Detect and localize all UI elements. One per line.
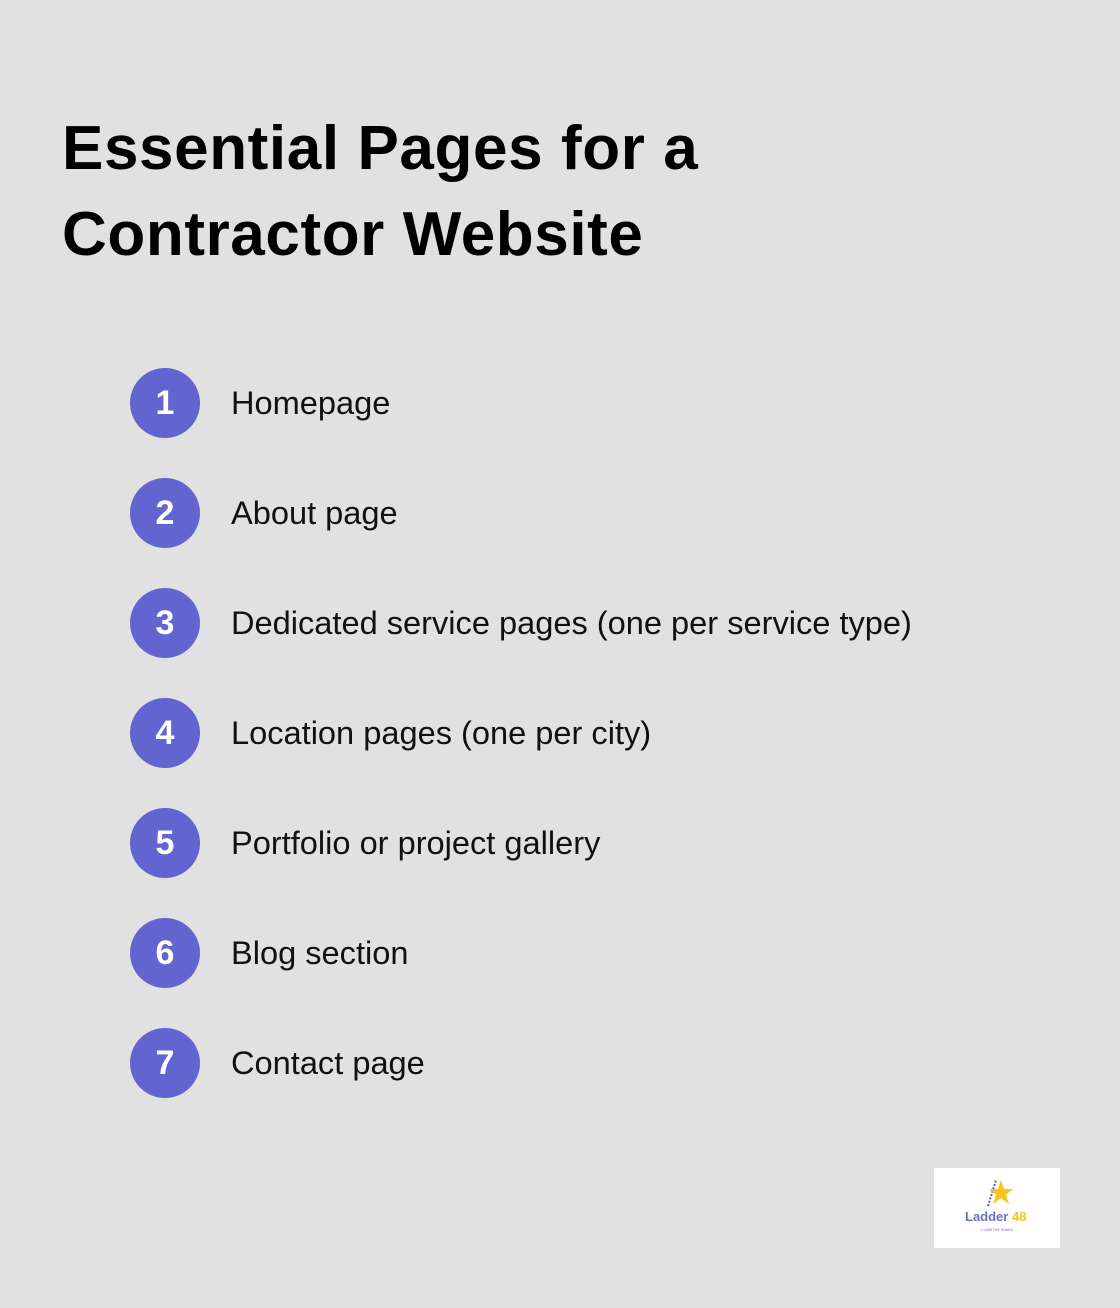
logo bbox=[934, 1168, 1060, 1248]
item 1 bbox=[130, 368, 390, 438]
logo: Ladder 48 bbox=[965, 1209, 1026, 1224]
title bbox=[62, 114, 698, 269]
logo: CLIMB THE RANKS bbox=[981, 1228, 1013, 1232]
item 7: Contact page bbox=[231, 1044, 425, 1081]
item 3 bbox=[130, 588, 912, 658]
item 6: Blog section bbox=[231, 934, 408, 971]
item 3: 3 bbox=[156, 604, 174, 642]
item 4 bbox=[130, 698, 651, 768]
item 1: 1 bbox=[156, 384, 174, 422]
item 2: 2 bbox=[156, 494, 174, 532]
item 7 bbox=[130, 1028, 425, 1098]
item 6 bbox=[130, 918, 408, 988]
item 2 bbox=[130, 478, 398, 548]
item 5: 5 bbox=[156, 824, 174, 862]
item 2: About page bbox=[231, 494, 398, 531]
title: Essential Pages for a bbox=[62, 114, 698, 183]
item 5: Portfolio or project gallery bbox=[231, 824, 600, 861]
item 4: 4 bbox=[156, 714, 174, 752]
item 5 bbox=[130, 808, 600, 878]
item 3: Dedicated service pages (one per service type) bbox=[231, 604, 912, 641]
item 1: Homepage bbox=[231, 384, 390, 421]
item 7: 7 bbox=[156, 1044, 174, 1082]
item 4: Location pages (one per city) bbox=[231, 714, 651, 751]
title: Contractor Website bbox=[62, 200, 644, 269]
item 6: 6 bbox=[156, 934, 174, 972]
